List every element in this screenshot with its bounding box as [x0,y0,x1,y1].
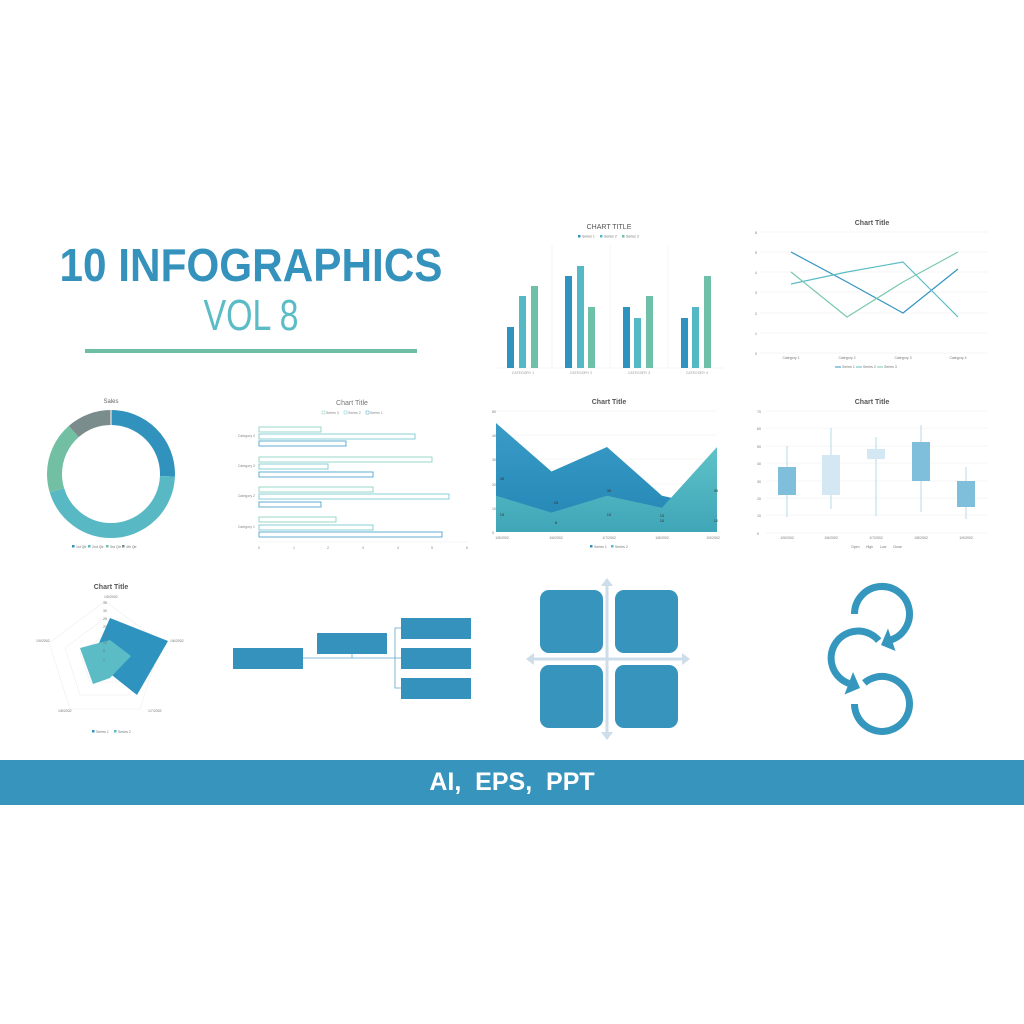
chart: area: 15 [660,513,665,518]
chart: horizontal bars: Category 4 [238,434,255,438]
chart: candlestick: 50 [757,445,761,449]
title [60,239,442,340]
chart: line: Category 1 [782,356,800,360]
chart: horizontal bars: 3 [362,546,364,550]
chart: area: 15 [500,512,505,517]
diagram: quadrant [526,578,690,740]
chart: horizontal bars: Category 2 [238,494,255,498]
chart: area: 10 [660,518,665,523]
chart: area: 1/6/2002 [549,536,563,540]
chart: area: Chart Title [592,399,626,406]
chart: candlestick: 0 [757,532,759,536]
chart: line: Category 2 [838,356,856,360]
chart: clustered column: CHART TITLE [587,224,632,231]
chart: radar: 1/5/2002 [104,595,118,599]
chart: radar: Chart Title [94,584,128,591]
subtitle: VOL 8 [204,291,298,340]
chart: area: 10 [492,507,496,511]
chart: horizontal bars: 1 [293,546,295,550]
chart: area: 45 [500,476,505,481]
chart: candlestick: High [866,545,873,549]
chart: candlestick: 60 [757,427,761,431]
chart: line: 0 [755,352,757,356]
chart: candlestick: Close [893,545,902,549]
chart: clustered column: CATEGORY 2 [570,371,592,375]
chart: clustered column: CATEGORY 3 [628,371,650,375]
chart: candlestick [757,399,988,549]
chart: clustered column: CATEGORY 1 [512,371,534,375]
chart: clustered column: Series 3 [626,234,639,238]
chart: radar: 5 [103,649,105,653]
chart: horizontal bars: Chart Title [336,400,368,407]
chart: line: 2 [755,312,757,316]
chart: area: 35 [607,488,612,493]
chart: radar: Series 2 [118,730,131,734]
chart: horizontal bars: Category 1 [238,525,255,529]
chart: line: Category 4 [949,356,967,360]
chart: horizontal bars [238,400,468,550]
chart: donut: 1st Qtr [76,545,87,549]
chart: horizontal bars: Category 3 [238,464,255,468]
chart: donut: 4th Qtr [126,545,138,549]
title: 10 INFOGRAPHICS [60,239,442,291]
chart: area: 35 [714,488,719,493]
chart: candlestick: 70 [757,410,761,414]
chart: area: 1/5/2002 [495,536,509,540]
chart: radar: 35 [103,601,107,605]
chart: clustered column: CATEGORY 4 [686,371,708,375]
chart: radar: 10 [103,641,107,645]
chart: area: 30 [492,458,496,462]
chart: radar: 25 [103,617,107,621]
chart: area: 1/7/2002 [602,536,616,540]
chart: candlestick: 1/6/2002 [824,536,838,540]
chart: radar: 1/7/2002 [148,709,162,713]
chart: horizontal bars: 4 [397,546,399,550]
chart: area: Series 2 [615,545,628,549]
chart: area: Series 1 [594,545,607,549]
diagram: cycle arrows [831,586,910,731]
chart: line: 1 [755,332,757,336]
chart: radar: 30 [103,609,107,613]
chart: radar [36,584,184,734]
chart: area: 50 [492,410,496,414]
chart: horizontal bars: 0 [258,546,260,550]
chart: candlestick: 1/9/2002 [959,536,973,540]
chart: radar: 1/9/2002 [36,639,50,643]
chart: candlestick: 1/5/2002 [780,536,794,540]
chart: candlestick: 10 [757,514,761,518]
chart: line: Category 3 [894,356,912,360]
chart: donut: Sales [103,399,119,405]
chart: line: Series 3 [884,365,897,369]
chart: horizontal bars: 2 [327,546,329,550]
chart: clustered column: Series 1 [582,234,595,238]
chart: area: 0 [492,531,494,535]
chart: area: 20 [492,483,496,487]
chart: line: 3 [755,291,757,295]
chart: area: 1/9/2002 [706,536,720,540]
diagram: hierarchy [233,618,471,699]
chart: radar: Series 1 [96,730,109,734]
chart: candlestick: Low [880,545,887,549]
banner [0,760,1024,805]
chart: area: 8 [555,520,558,525]
chart: clustered column: Series 2 [604,234,617,238]
chart: area: 1/8/2002 [655,536,669,540]
chart: radar: 20 [103,625,107,629]
chart: donut [54,399,168,549]
chart: area: 10 [714,518,719,523]
chart: area [492,399,720,549]
chart: horizontal bars: Series 1 [370,411,383,415]
chart: radar: 1/8/2002 [58,709,72,713]
chart: candlestick: 40 [757,462,761,466]
chart: horizontal bars: 6 [466,546,468,550]
chart: area: 15 [607,512,612,517]
chart: line: Series 2 [863,365,876,369]
chart: horizontal bars: Series 2 [348,411,361,415]
chart: clustered column [494,224,724,375]
chart: candlestick: 1/7/2002 [869,536,883,540]
chart: radar: 1/6/2002 [170,639,184,643]
banner: AI, EPS, PPT [429,768,595,796]
chart: candlestick: 1/8/2002 [914,536,928,540]
chart: line [755,220,988,369]
chart: donut: 2nd Qtr [92,545,105,549]
title underline [85,349,417,353]
chart: line: 4 [755,271,757,275]
chart: horizontal bars: Series 3 [326,411,339,415]
chart: donut: 3rd Qtr [110,545,122,549]
chart: radar: 0 [103,658,105,662]
chart: candlestick: Chart Title [855,399,889,406]
chart: line: 6 [755,231,757,235]
chart: radar: 15 [103,633,107,637]
chart: line: Chart Title [855,220,889,227]
chart: line: 5 [755,251,757,255]
chart: candlestick: Open [851,545,860,549]
chart: candlestick: 30 [757,480,761,484]
chart: candlestick: 20 [757,497,761,501]
chart: area: 25 [554,500,559,505]
chart: area: 40 [492,434,496,438]
chart: line: Series 1 [842,365,855,369]
chart: horizontal bars: 5 [431,546,433,550]
